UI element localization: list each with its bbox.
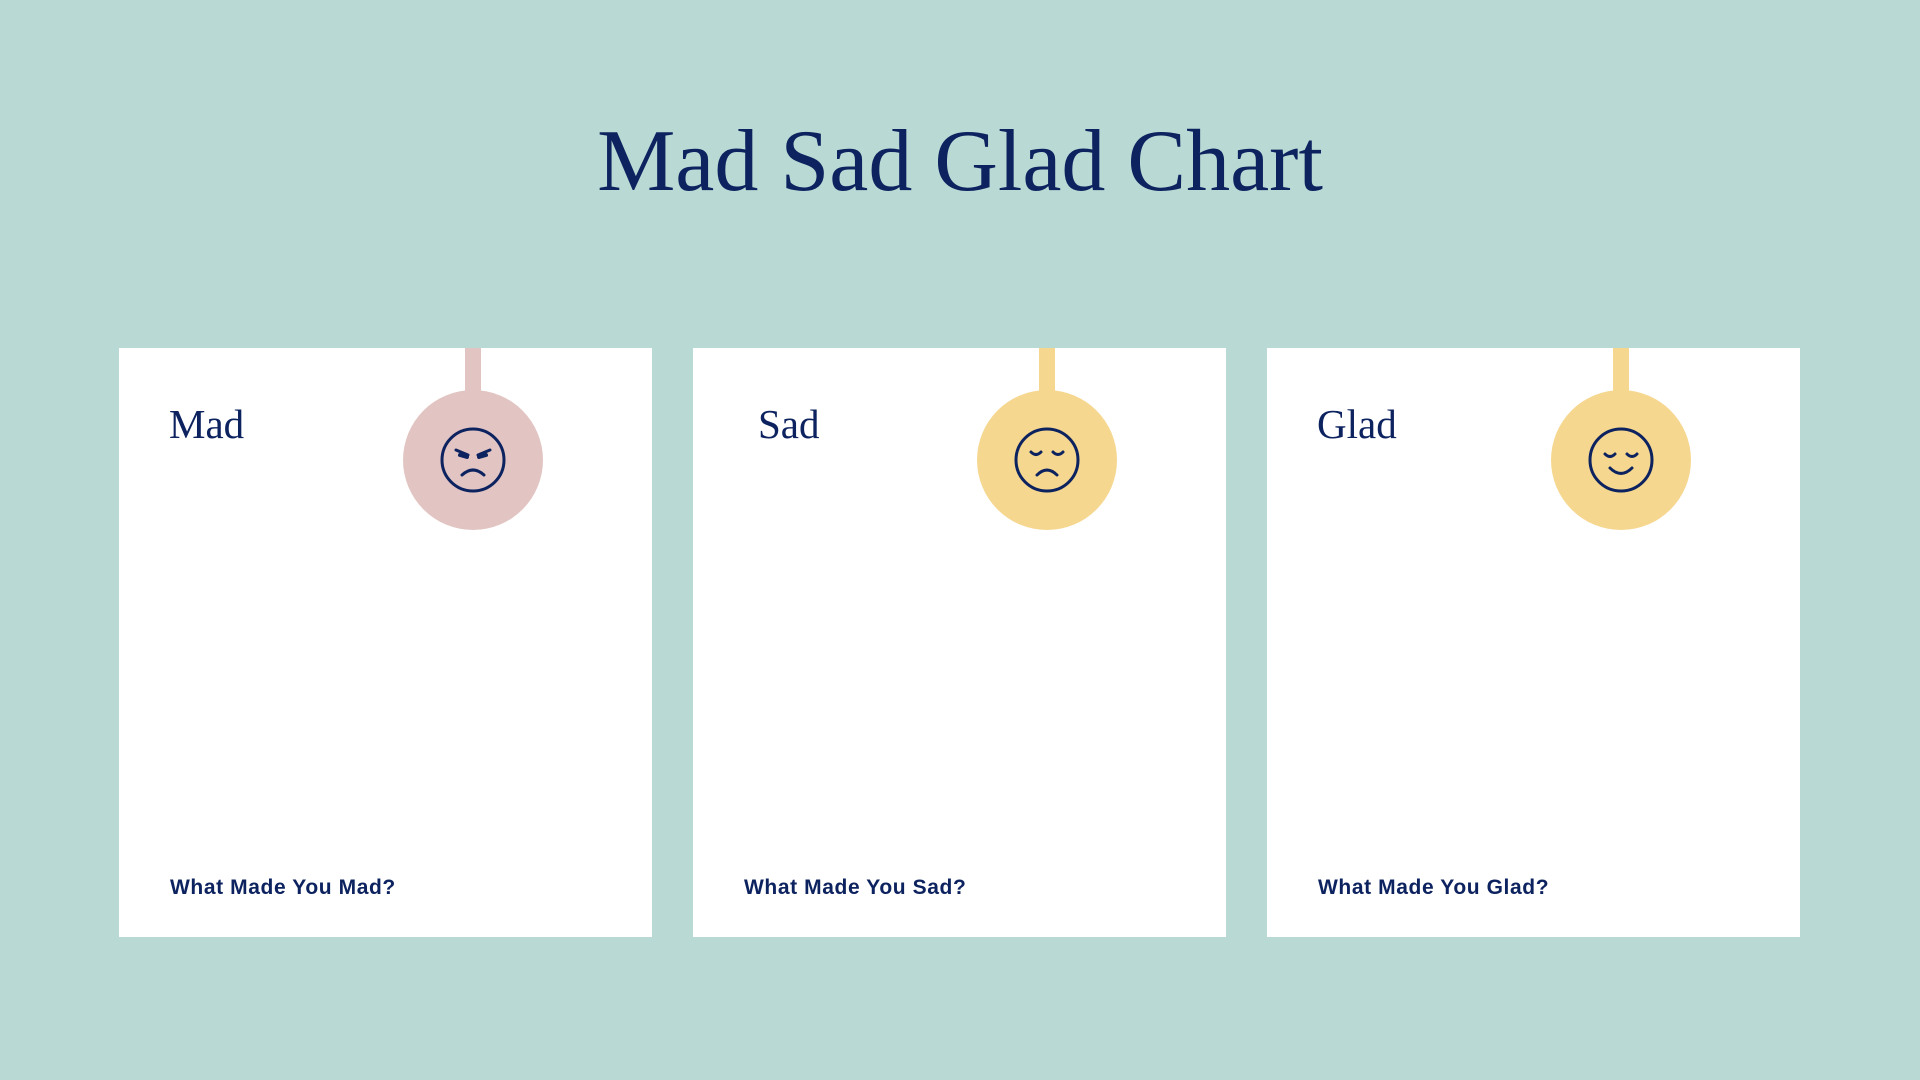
label: Glad: Glad [1317,401,1397,447]
panel: mad [119,348,652,937]
title: Mad Sad Glad Chart [597,113,1323,210]
prompt: What Made You Mad? [170,876,396,899]
icon: angry face [403,390,543,530]
panel: sad [693,348,1226,937]
label: Sad: Sad [758,401,820,447]
label: Mad: Mad [169,401,244,447]
panel: glad [1267,348,1800,937]
prompt: What Made You Sad? [744,876,966,899]
prompt: What Made You Glad? [1318,876,1549,899]
icon: happy face [1551,390,1691,530]
icon: sad face [977,390,1117,530]
